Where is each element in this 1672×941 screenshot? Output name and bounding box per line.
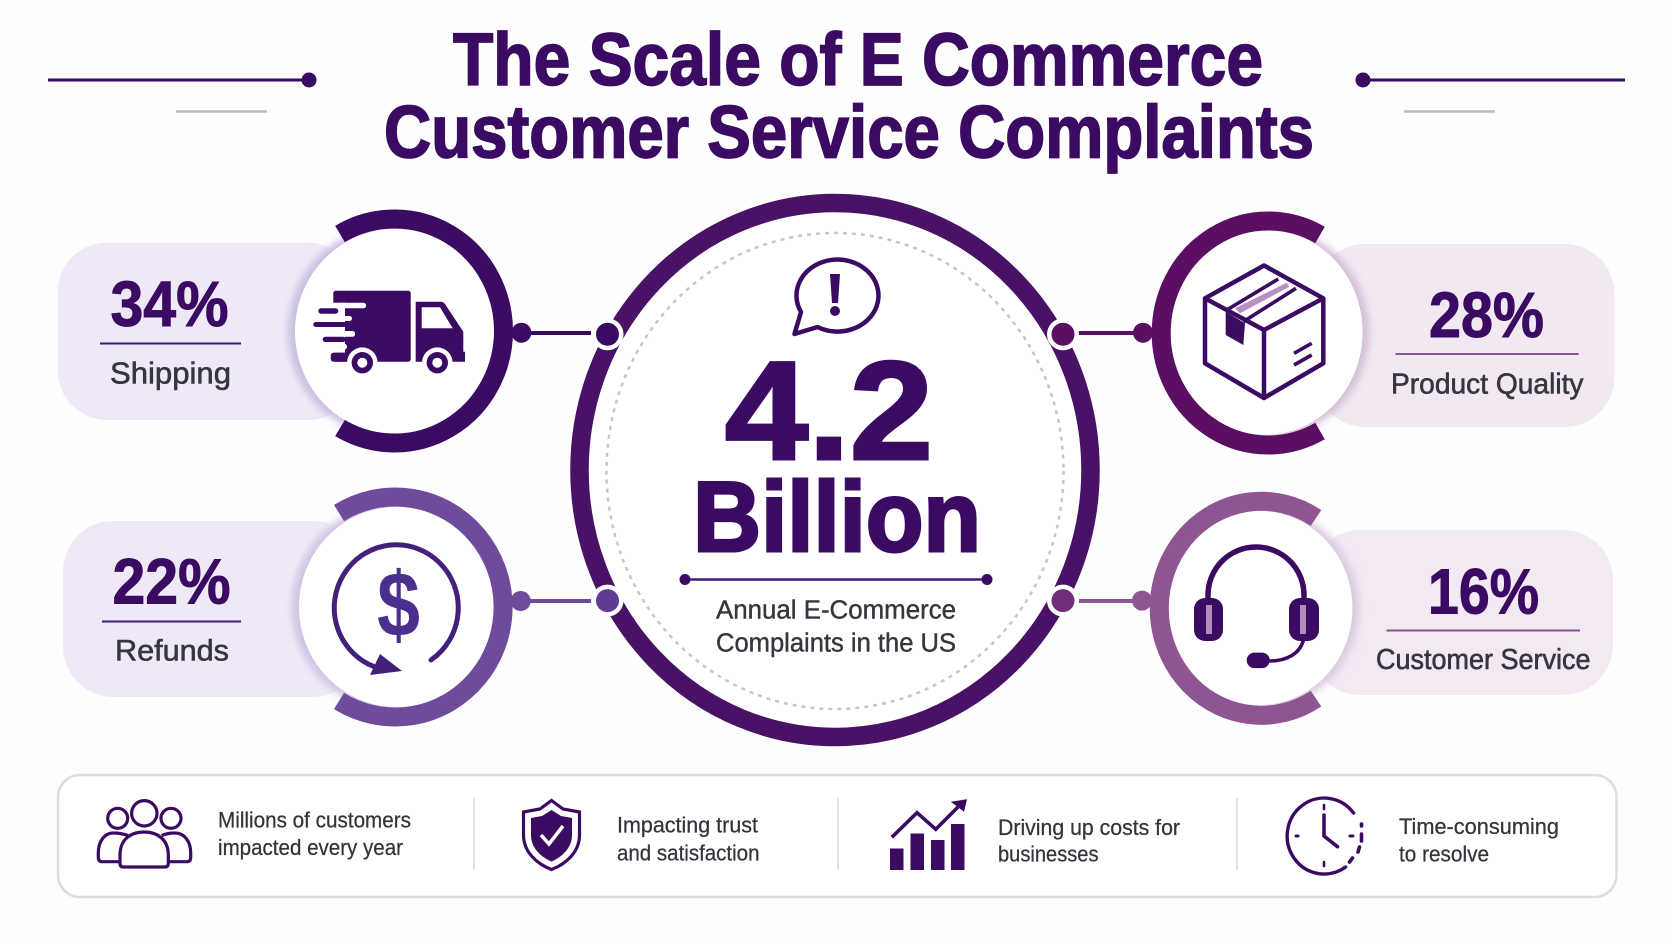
panel: product quality bbox=[1161, 221, 1614, 445]
icon: dollar refund: $ bbox=[377, 554, 420, 656]
icon: shield check bbox=[524, 800, 580, 870]
panel: shipping bbox=[58, 219, 503, 443]
caption: Complaints in the US bbox=[716, 630, 956, 658]
icon: people bbox=[98, 801, 191, 867]
title ornament: left bbox=[48, 72, 316, 112]
icon: rising chart bbox=[890, 799, 967, 870]
text: time-consuming: Time-consuming bbox=[1399, 814, 1559, 839]
title: The Scale of E Commerce bbox=[453, 18, 1263, 101]
stat: 16%: 16% bbox=[1428, 556, 1539, 628]
bottom panel bbox=[58, 775, 1616, 897]
connector: customer service bbox=[1078, 591, 1152, 611]
caption bbox=[716, 596, 956, 658]
text: millions of customers: Millions of customers bbox=[218, 808, 411, 832]
icon: delivery truck bbox=[313, 291, 465, 378]
title ornament: right bbox=[1356, 72, 1625, 112]
stat: 22%: 22% bbox=[112, 546, 230, 618]
title: Customer Service Complaints bbox=[384, 90, 1314, 174]
text: driving up costs: businesses bbox=[998, 842, 1098, 866]
label: product quality: Product Quality bbox=[1391, 368, 1584, 400]
title bbox=[384, 18, 1314, 174]
text: impacting trust: and satisfaction bbox=[617, 840, 760, 866]
text: driving up costs: Driving up costs for bbox=[998, 815, 1180, 840]
central circle bbox=[580, 203, 1090, 737]
icon: headset bbox=[1194, 547, 1319, 668]
label: shipping: Shipping bbox=[110, 356, 231, 390]
caption: Annual E-Commerce bbox=[716, 596, 956, 624]
text: millions of customers: impacted every year bbox=[218, 835, 403, 860]
connector: shipping bbox=[511, 323, 591, 343]
icon: speech bubble alert bbox=[794, 260, 878, 334]
icon: clock bbox=[1287, 798, 1362, 874]
text: impacting trust: Impacting trust bbox=[617, 812, 758, 838]
text: time-consuming: to resolve bbox=[1399, 842, 1489, 866]
stat: 4.2: 4.2 bbox=[725, 332, 933, 489]
label: refunds: Refunds bbox=[115, 634, 229, 668]
panel: customer service bbox=[1159, 501, 1613, 715]
label: customer service: Customer Service bbox=[1376, 644, 1590, 676]
text: impacting trust bbox=[617, 812, 760, 866]
text: time-consuming bbox=[1399, 814, 1559, 866]
panel: refunds bbox=[63, 497, 503, 717]
icon: package box bbox=[1205, 266, 1323, 398]
stat: 34%: 34% bbox=[110, 268, 228, 340]
stat: 28%: 28% bbox=[1429, 279, 1544, 351]
text: driving up costs bbox=[998, 815, 1180, 866]
divider bbox=[680, 574, 992, 585]
text: millions of customers bbox=[218, 808, 411, 860]
stat: billion: Billion bbox=[693, 461, 981, 572]
icon: dollar refund bbox=[334, 545, 458, 675]
connector: product quality bbox=[1078, 323, 1153, 343]
connector: refunds bbox=[511, 591, 591, 611]
